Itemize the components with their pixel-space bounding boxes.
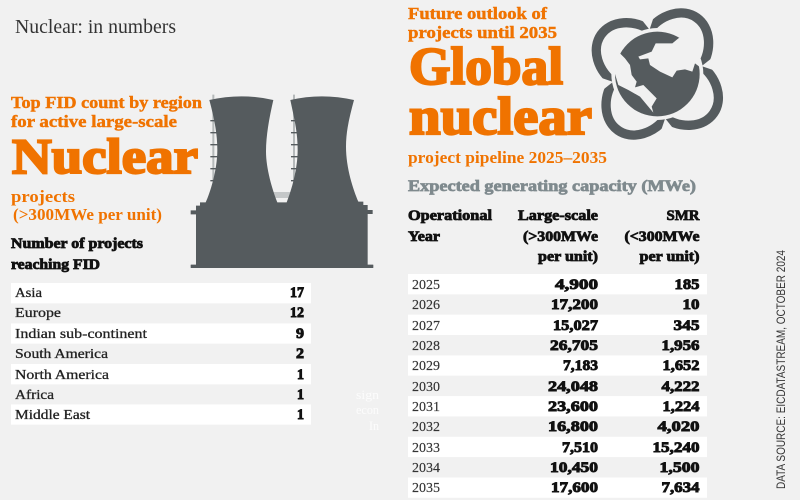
clipped ghost text: In (369, 418, 379, 433)
row: 2026: 17,200 (551, 297, 598, 313)
row: Asia: Asia (15, 286, 43, 301)
heading: global nuclear: projects until 2035 (408, 23, 557, 42)
table: projects by region (11, 283, 311, 425)
clipped ghost text: sign (356, 387, 380, 402)
row: 2025: 2025 (412, 278, 440, 293)
heading: global nuclear (408, 4, 607, 167)
row: 2025: 4,900 (555, 277, 598, 293)
row: Europe (15, 305, 304, 321)
row: 2030: 2030 (412, 380, 440, 395)
table header: SMR (666, 208, 700, 224)
heading: top FID count: Top FID count by region (11, 93, 203, 112)
row: 2034: 2034 (412, 461, 440, 476)
heading: top FID count: for active large-scale (11, 112, 178, 131)
row: 2027 (412, 318, 700, 334)
row: 2029: 7,183 (563, 358, 598, 374)
heading: top FID count: (>300MWe per unit) (13, 205, 162, 224)
table header: per unit) (538, 249, 598, 265)
row: 2027: 15,027 (553, 318, 599, 334)
row: Africa (15, 387, 304, 403)
table header: per unit) (640, 249, 700, 265)
row: 2032 (412, 419, 700, 435)
table header: (>300MWe (523, 229, 598, 245)
column heading: number of projects (11, 236, 143, 273)
row: 2034: 1,500 (660, 460, 700, 476)
row: South America: South America (15, 347, 109, 362)
icon: cooling towers (191, 95, 373, 268)
row: 2032: 2032 (412, 420, 440, 435)
heading: top FID count: projects (11, 187, 75, 206)
row: Middle East: Middle East (15, 408, 90, 423)
row: 2030: 24,048 (548, 379, 598, 395)
row: 2028: 2028 (412, 339, 440, 354)
row: 2027: 345 (674, 318, 700, 334)
row: 2031: 1,224 (662, 399, 700, 415)
row: Middle East (15, 407, 304, 423)
row: Indian sub-continent: 9 (296, 326, 304, 342)
clipped ghost text (356, 387, 380, 433)
row: 2032: 16,800 (548, 419, 598, 435)
row: South America (15, 346, 304, 362)
row: 2026: 2026 (412, 298, 440, 313)
row: 2026 (412, 297, 700, 313)
row: South America: 2 (296, 346, 304, 362)
table header: Large-scale (518, 208, 598, 224)
row: 2031: 2031 (412, 400, 440, 415)
row: 2029 (412, 358, 700, 374)
row: 2033: 15,240 (652, 440, 700, 456)
row: 2031 (412, 399, 700, 415)
row: North America (15, 367, 304, 383)
row: 2030 (412, 379, 700, 395)
panel: global nuclear pipeline (408, 0, 732, 498)
row: Indian sub-continent (15, 326, 304, 342)
row: 2034: 10,450 (550, 460, 598, 476)
row: 2033: 7,510 (562, 440, 598, 456)
table: capacity by year (408, 274, 707, 498)
data source note: DATA SOURCE: EICDATASTREAM, OCTOBER 2024 (776, 249, 788, 489)
row: North America: 1 (297, 367, 304, 383)
heading: top FID count (11, 93, 203, 224)
row: Middle East: 1 (297, 407, 304, 423)
row: 2027: 2027 (412, 319, 440, 334)
row: Asia (15, 285, 304, 301)
subheading: expected generating capacity: Expected generating capacity (MWe) (408, 178, 696, 195)
row: 2028: 1,956 (662, 338, 700, 354)
row: 2028 (412, 338, 700, 354)
heading: top FID count: Nuclear (12, 128, 198, 184)
table header: Operational (408, 208, 492, 224)
row: 2029: 2029 (412, 359, 440, 374)
row: 2035: 17,600 (551, 480, 598, 496)
row: 2030: 4,222 (662, 379, 700, 395)
panel: top FID count by region (11, 93, 373, 425)
row: 2028: 26,705 (550, 338, 598, 354)
heading: global nuclear: Global (409, 38, 563, 96)
column heading: number of projects: Number of projects (11, 236, 143, 252)
row: Indian sub-continent: Indian sub-continent (15, 327, 147, 342)
row: 2035: 2035 (412, 481, 440, 496)
row: 2033 (412, 440, 700, 456)
clipped ghost text: econ (356, 402, 379, 417)
row: 2032: 4,020 (658, 419, 700, 435)
row: 2034 (412, 460, 700, 476)
row: 2029: 1,652 (662, 358, 700, 374)
table header (408, 208, 700, 265)
row: 2031: 23,600 (548, 399, 598, 415)
column heading: number of projects: reaching FID (11, 257, 100, 273)
row: Europe: 12 (290, 305, 304, 321)
row: Africa: 1 (297, 387, 304, 403)
table header: (<300MWe (624, 229, 700, 245)
heading: global nuclear: Future outlook of (408, 4, 547, 23)
row: 2025: 185 (674, 277, 700, 293)
table header: Year (408, 229, 440, 245)
icon: globe with orbits (583, 0, 732, 149)
title: Nuclear: in numbers (15, 16, 176, 38)
row: North America: North America (15, 368, 110, 383)
heading: global nuclear: project pipeline 2025–2035 (408, 148, 607, 167)
row: Asia: 17 (290, 285, 304, 301)
row: 2035: 7,634 (662, 480, 700, 496)
heading: global nuclear: nuclear (409, 88, 592, 146)
row: 2033: 2033 (412, 441, 440, 456)
row: 2026: 10 (682, 297, 700, 313)
row: Europe: Europe (15, 306, 61, 321)
row: 2025 (412, 277, 700, 293)
row: Africa: Africa (15, 388, 55, 403)
row: 2035 (412, 480, 700, 496)
